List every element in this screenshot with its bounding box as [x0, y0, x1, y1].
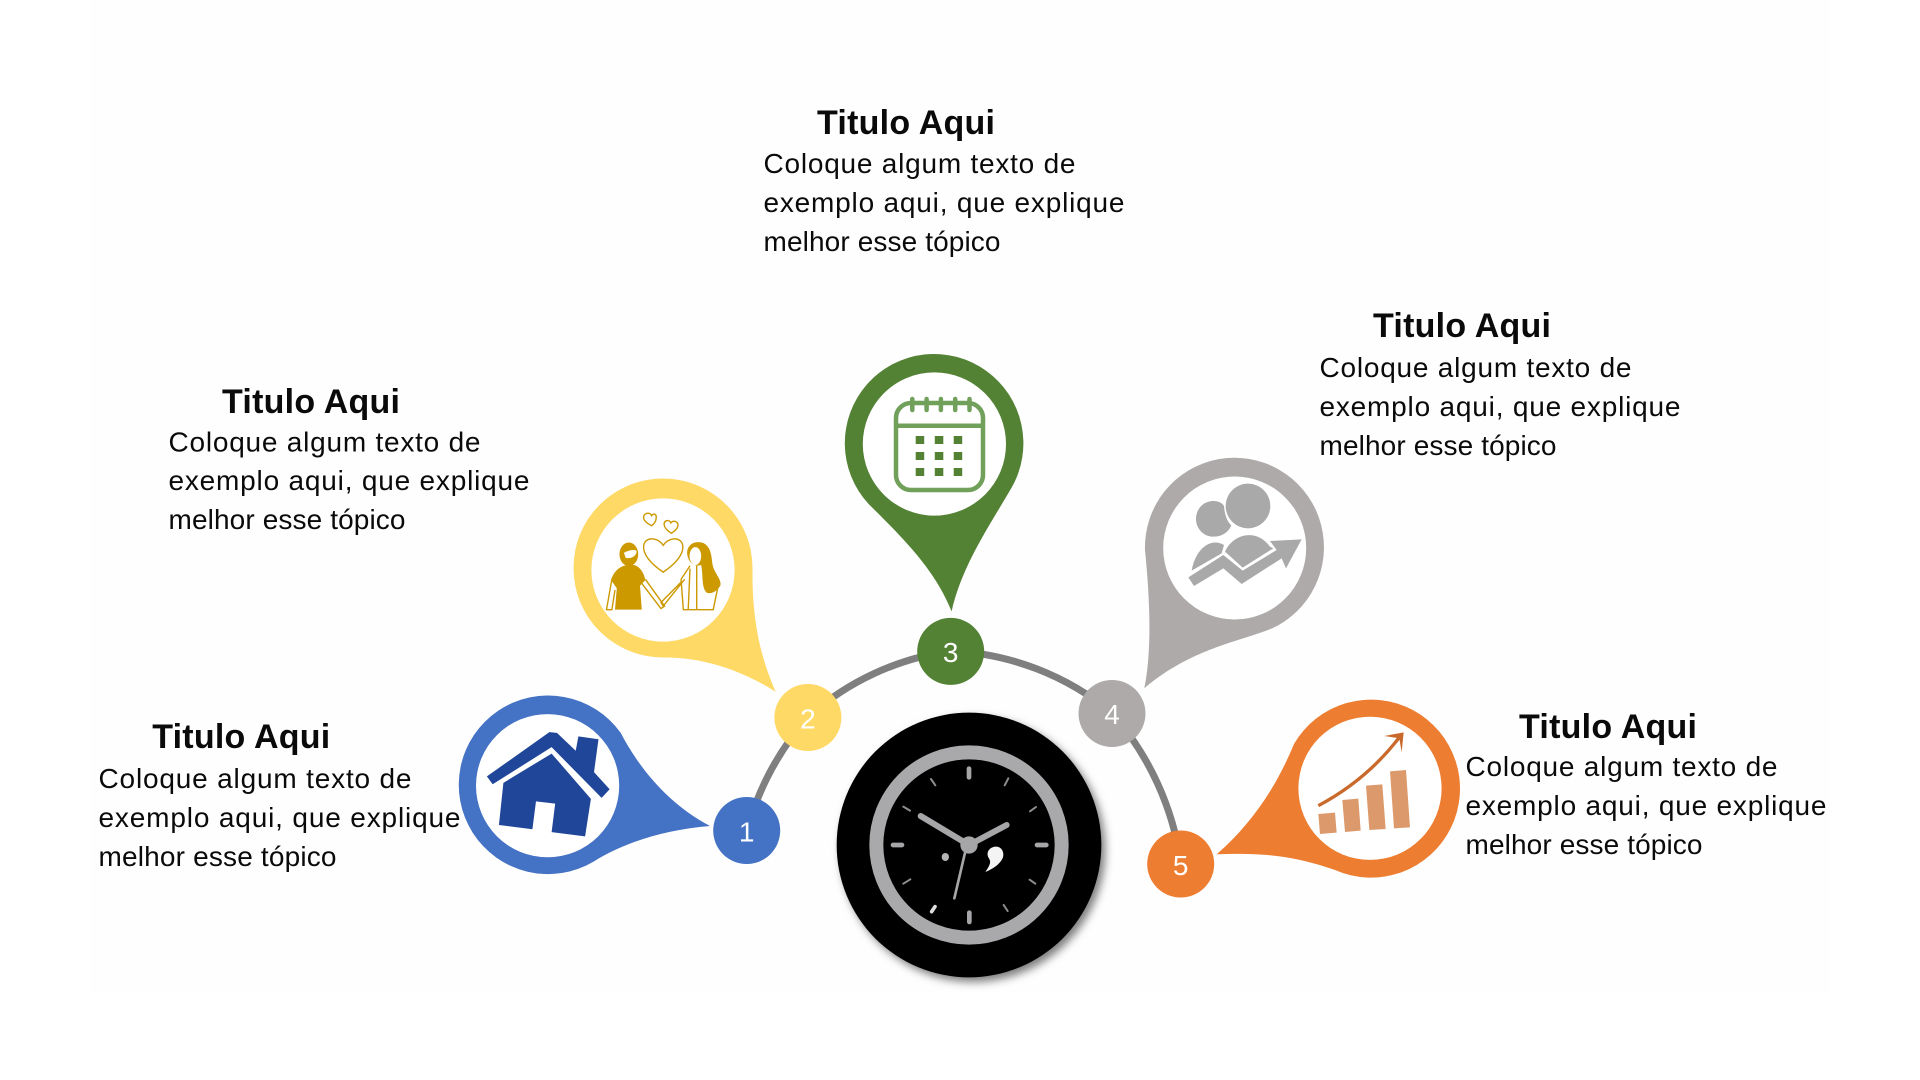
text block 3: Coloque algum texto de: [764, 148, 1076, 179]
step 1: blue pin with house: [459, 696, 780, 874]
step 4: grey pin with people and arrow: [1078, 458, 1324, 747]
text block 2: Coloque algum texto de: [168, 426, 480, 458]
arc connecting the numbered steps: [747, 651, 1181, 864]
text block 4: exemplo aqui, que explique: [1320, 391, 1680, 422]
text block 4: melhor esse tópico: [1320, 430, 1556, 461]
number 4: 4: [1104, 699, 1120, 730]
text block 2: melhor esse tópico: [168, 504, 406, 535]
text block 2: Titulo Aqui: [222, 383, 400, 421]
text block 5: [1466, 708, 1826, 860]
text block 4: Coloque algum texto de: [1320, 352, 1632, 383]
number 2: [774, 684, 841, 751]
text block 4: Titulo Aqui: [1373, 307, 1551, 345]
text block 3: exemplo aqui, que explique: [764, 187, 1124, 218]
icon: people with growth arrow: [1188, 484, 1302, 586]
text block 4: [1320, 307, 1680, 461]
number 5: [1147, 830, 1214, 898]
icon: calendar: [896, 399, 983, 490]
clock: [837, 713, 1101, 977]
number 1: 1: [739, 816, 754, 848]
text block 5: melhor esse tópico: [1466, 829, 1702, 860]
text block 2: [168, 383, 530, 535]
icon: couple: [607, 513, 721, 610]
number 5: 5: [1173, 850, 1188, 881]
text block 5: Titulo Aqui: [1519, 708, 1697, 746]
text block 3: [764, 104, 1124, 257]
step 3: green pin with calendar: [845, 354, 1023, 685]
icon: house: [487, 732, 610, 836]
text block 1: [98, 718, 460, 872]
step 2: yellow pin with couple: [573, 478, 841, 751]
bottom edge mask under clock shadow: [0, 992, 1920, 1080]
text block 5: exemplo aqui, que explique: [1466, 790, 1826, 821]
number 4: [1078, 680, 1146, 747]
text block 1: exemplo aqui, que explique: [98, 802, 460, 833]
text block 1: Coloque algum texto de: [98, 763, 412, 794]
number 3: [917, 618, 984, 685]
number 3: 3: [943, 637, 958, 668]
text block 1: melhor esse tópico: [98, 841, 336, 872]
text block 2: exemplo aqui, que explique: [168, 465, 530, 496]
number 2: 2: [800, 704, 816, 734]
text block 3: Titulo Aqui: [817, 104, 995, 142]
text block 1: Titulo Aqui: [152, 718, 330, 756]
step 5: orange pin with chart: [1147, 700, 1460, 898]
icon: rising bar chart: [1318, 732, 1410, 834]
number 1: [713, 797, 780, 864]
text block 3: melhor esse tópico: [764, 226, 1000, 257]
text block 5: Coloque algum texto de: [1466, 751, 1778, 782]
